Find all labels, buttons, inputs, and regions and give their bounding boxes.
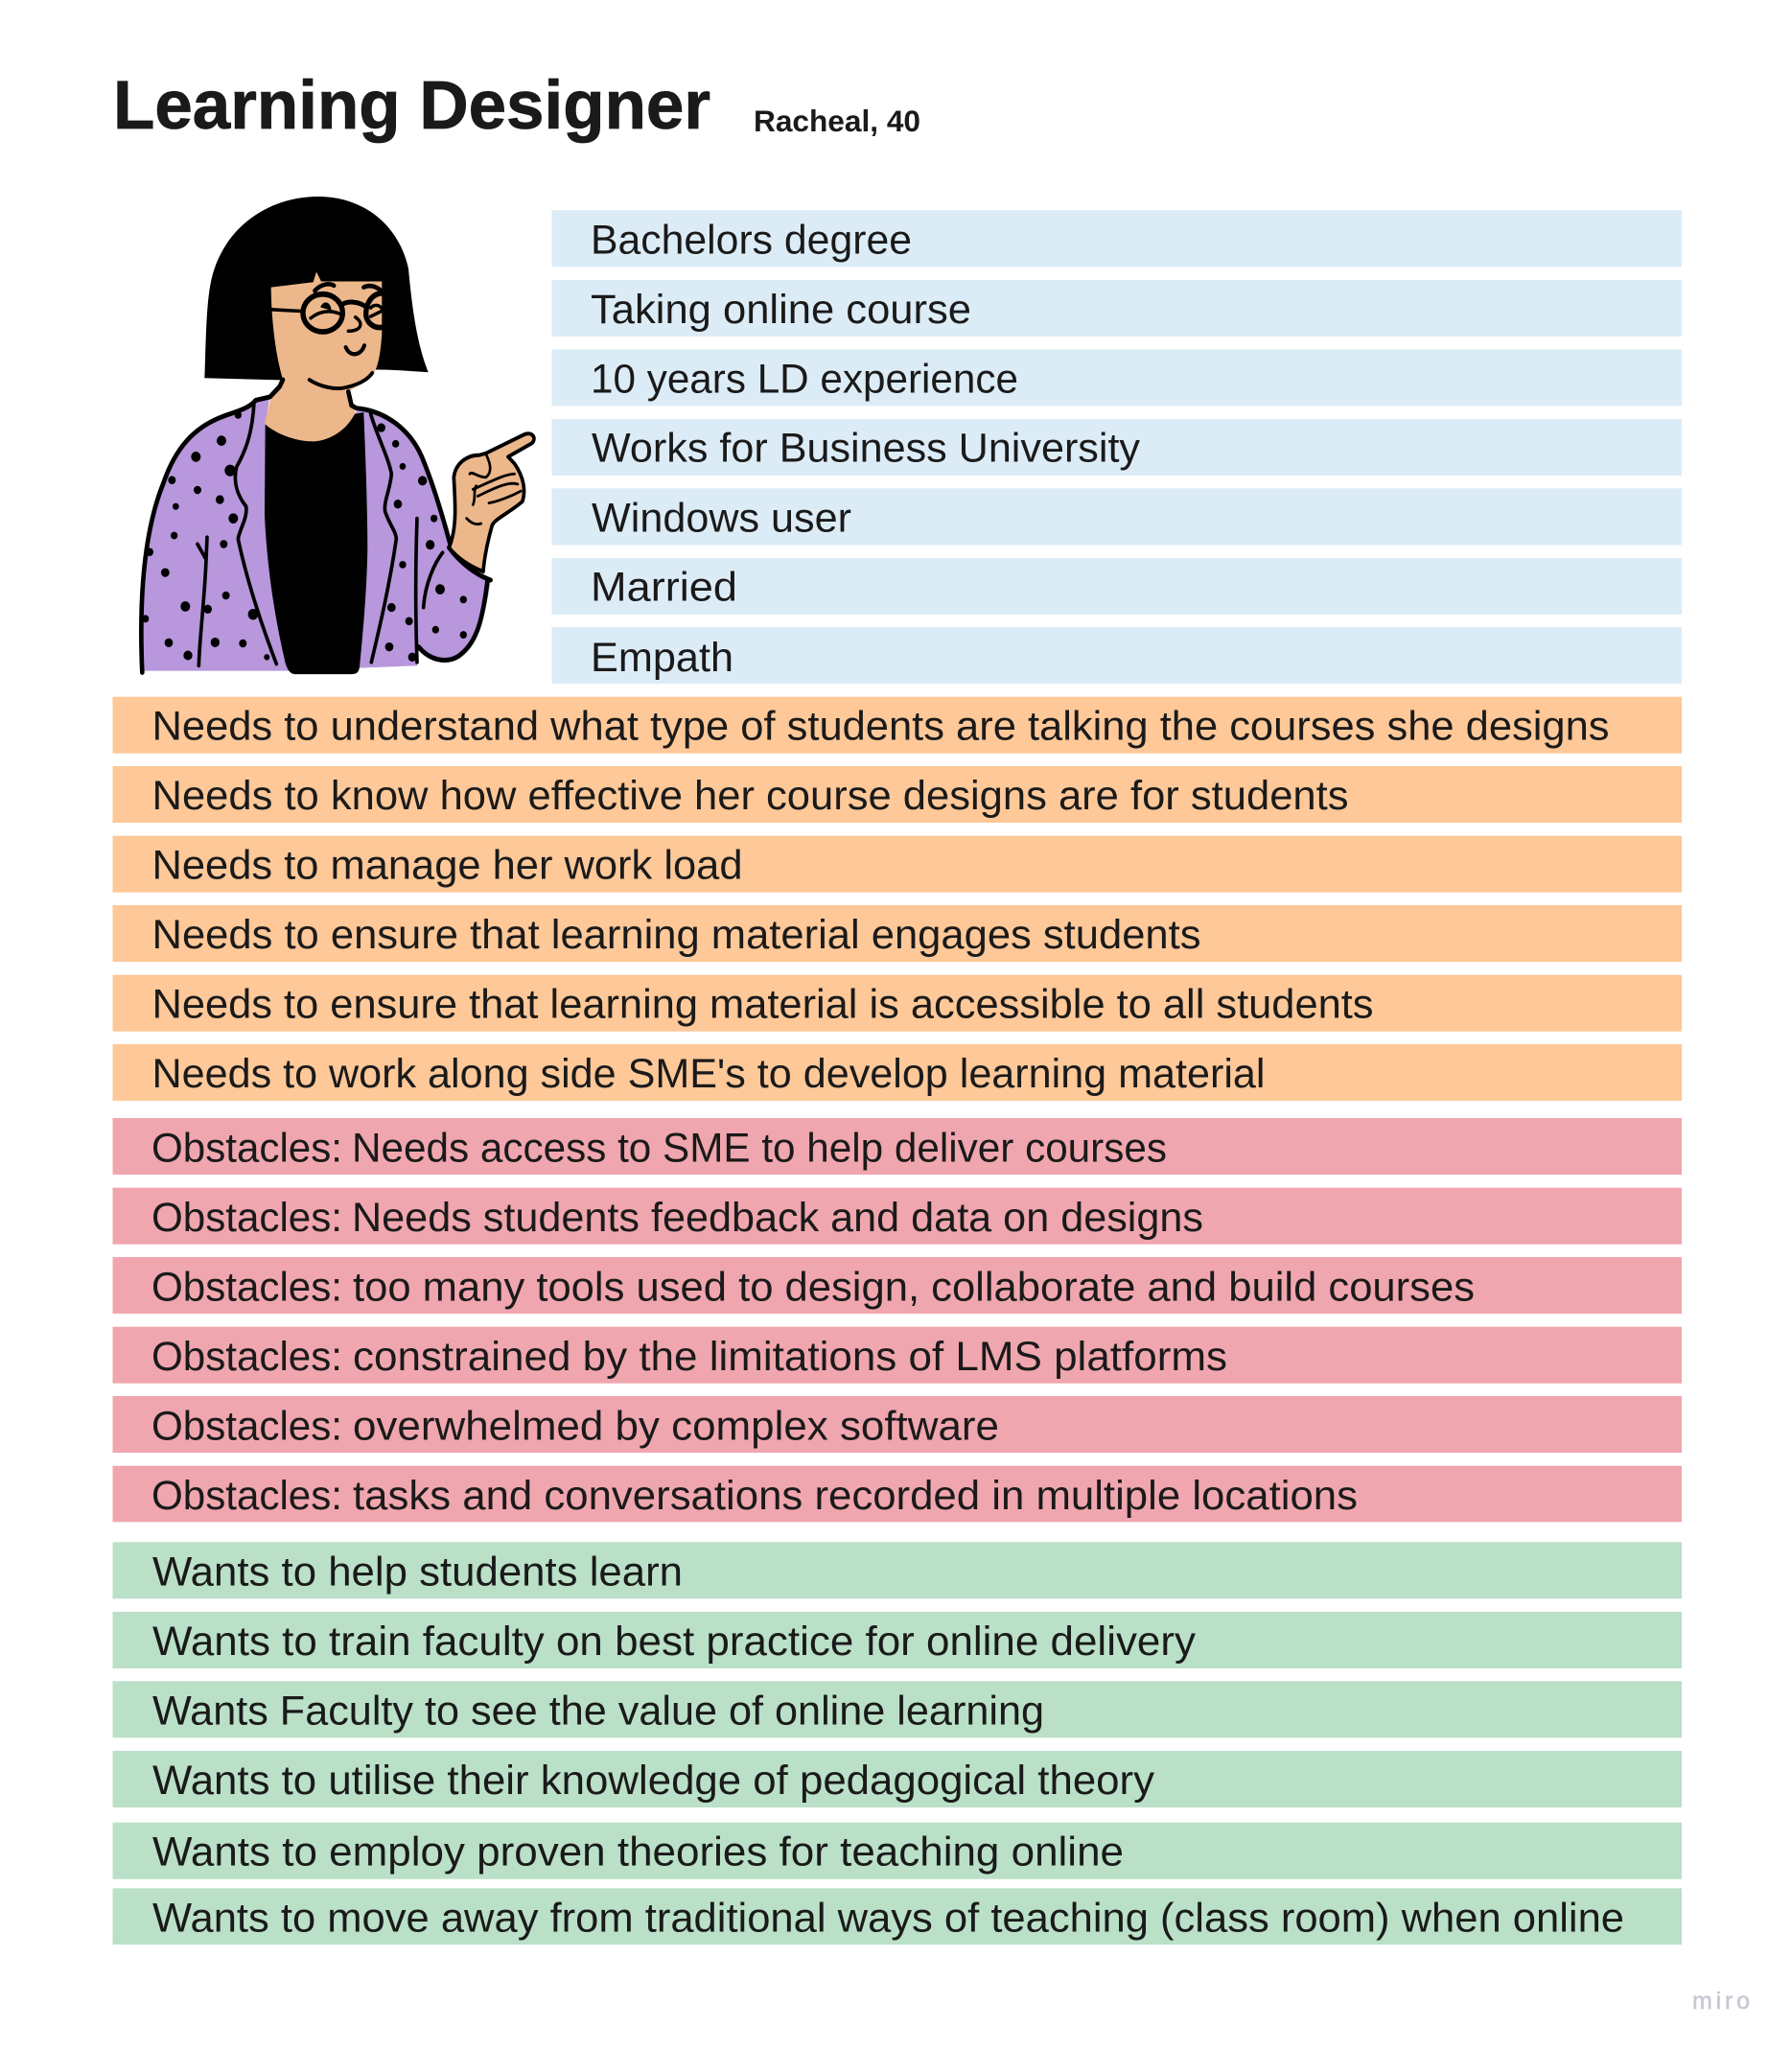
panel: wants (113, 1542, 1682, 1945)
obstacle 1: Needs access to SME to help deliver courses (352, 1127, 1167, 1172)
need 3: Needs to manage her work load (151, 844, 742, 889)
fact: operating system (552, 488, 1682, 545)
fact: marital status (552, 558, 1682, 615)
need 5 (113, 975, 1682, 1032)
fact: course: Taking online course (591, 288, 971, 333)
need 4: Needs to ensure that learning material engages students (151, 913, 1200, 958)
fact: degree (552, 210, 1682, 267)
want 2 (113, 1612, 1682, 1668)
fact: employer: Works for Business University (592, 427, 1141, 472)
fact: personality (552, 627, 1682, 684)
panel: obstacles (113, 1118, 1682, 1522)
want 1 (113, 1542, 1682, 1598)
obstacle 3: Obstacles: (151, 1266, 342, 1311)
shirt (265, 412, 367, 674)
fact: operating system: Windows user (592, 496, 851, 541)
fact: marital status: Married (591, 566, 737, 611)
obstacle 6: Obstacles: (151, 1474, 342, 1519)
want 3 (113, 1681, 1682, 1737)
fact: course (552, 280, 1682, 337)
obstacle 3: too many tools used to design, collaborate and build courses (353, 1266, 1475, 1311)
obstacle 1 (113, 1118, 1682, 1175)
want 5 (113, 1823, 1682, 1879)
want 1: Wants to help students learn (152, 1550, 683, 1595)
fact: degree: Bachelors degree (591, 218, 912, 263)
need 4 (113, 905, 1682, 962)
obstacle 3 (113, 1257, 1682, 1314)
jacket outlines (141, 380, 491, 672)
need 2 (113, 766, 1682, 823)
jacket (141, 395, 491, 671)
obstacle 2: Needs students feedback and data on designs (352, 1196, 1203, 1241)
fact: employer (552, 419, 1682, 476)
subtitle: name and age: Racheal, 40 (754, 104, 920, 138)
obstacle 5 (113, 1396, 1682, 1453)
need 6 (113, 1044, 1682, 1101)
want 5: Wants to employ proven theories for teaching online (152, 1830, 1124, 1876)
jacket polka dots (142, 411, 467, 662)
obstacle 4 (113, 1327, 1682, 1384)
obstacle 1: Obstacles: (151, 1127, 342, 1172)
panel: needs (113, 697, 1682, 1101)
pointing hand (449, 433, 534, 571)
obstacle 2 (113, 1188, 1682, 1245)
obstacle 5: overwhelmed by complex software (353, 1405, 999, 1450)
watermark: miro: miro (1692, 1988, 1750, 2015)
want 2: Wants to train faculty on best practice for online delivery (152, 1620, 1197, 1665)
need 5: Needs to ensure that learning material is accessible to all students (151, 983, 1373, 1028)
obstacle 4: constrained by the limitations of LMS platforms (353, 1335, 1227, 1380)
fact: experience (552, 349, 1682, 406)
want 3: Wants Faculty to see the value of online learning (152, 1689, 1044, 1734)
obstacle 5: Obstacles: (151, 1405, 342, 1450)
want 4: Wants to utilise their knowledge of pedagogical theory (152, 1759, 1155, 1804)
obstacle 2: Obstacles: (151, 1196, 342, 1241)
need 6: Needs to work along side SME's to develop learning material (151, 1052, 1266, 1097)
need 1: Needs to understand what type of students are talking the courses she designs (151, 705, 1609, 750)
want 4 (113, 1751, 1682, 1807)
title: Learning Designer (113, 67, 710, 144)
illustration: woman with glasses pointing right (141, 197, 534, 674)
fact: experience: 10 years LD experience (591, 357, 1018, 402)
obstacle 6 (113, 1466, 1682, 1522)
face details: glasses, nose, smile (271, 284, 382, 388)
hair (204, 197, 429, 380)
panel: profile facts (552, 210, 1682, 684)
need 2: Needs to know how effective her course designs are for students (151, 774, 1348, 819)
obstacle 4: Obstacles: (151, 1335, 342, 1380)
want 6: Wants to move away from traditional ways of teaching (class room) when online (152, 1896, 1624, 1941)
need 3 (113, 836, 1682, 893)
obstacle 6: tasks and conversations recorded in multiple locations (353, 1474, 1358, 1519)
face and neck (265, 272, 382, 443)
fact: personality: Empath (591, 636, 733, 681)
